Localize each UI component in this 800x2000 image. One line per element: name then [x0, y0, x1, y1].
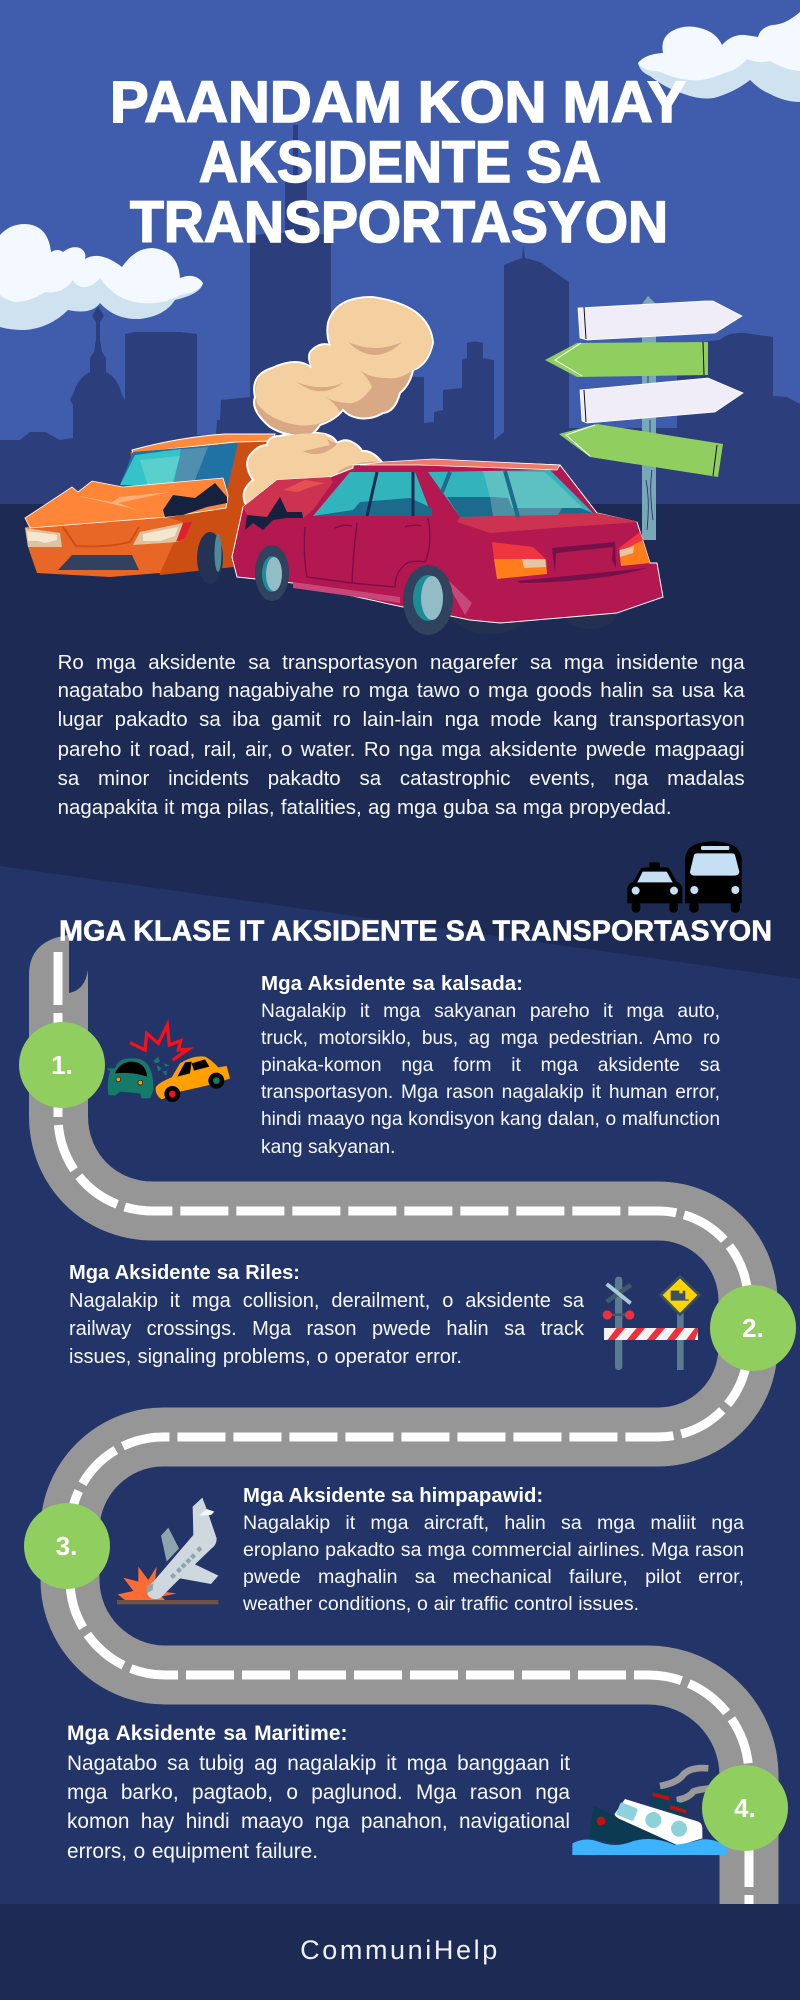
text: maritime accidents: errors, o equipment failure. [67, 1840, 318, 1862]
number badge 4 [702, 1765, 788, 1851]
signpost with four arrows [545, 296, 743, 540]
text: air accidents: pwede maghalin sa mechanical failure, pilot error, [243, 1566, 744, 1588]
car rear window [428, 470, 593, 517]
red car [232, 459, 663, 635]
text: rail accidents: Nagalakip it mga collision, derailment, o aksidente sa [69, 1290, 584, 1312]
panel: maritime accidents [67, 1722, 788, 1862]
icon: two cars colliding [106, 1019, 230, 1102]
number badge 1: 1. [51, 1050, 73, 1080]
text: road accidents [261, 1001, 720, 1158]
number badge 4: 4. [734, 1793, 756, 1823]
icon: sinking ship [572, 1764, 727, 1855]
smoke cloud [244, 297, 433, 512]
icon: railway crossing [602, 1275, 701, 1370]
intro text: Ro mga aksidente sa transportasyon nagarefer sa mga insidente nga [58, 651, 745, 674]
panel: rail accidents [69, 1262, 796, 1371]
text: air accidents [243, 1512, 744, 1615]
footer: brand name [0, 1904, 800, 2000]
intro text [58, 651, 745, 818]
car lights and details [492, 542, 546, 559]
orange car [25, 434, 275, 584]
intro text: pareho it road, rail, air, o water. Ro nga mga aksidente pwede magpaagi [58, 738, 745, 760]
cloud: left [0, 224, 203, 330]
panel: road accidents [19, 972, 720, 1158]
number badge 1 [19, 1022, 105, 1108]
panel: air accidents [24, 1485, 744, 1615]
intro text: nagatabo habang nagabiyahe ro mga tawo o mga goods halin sa usa ka [58, 679, 745, 702]
title: PAANDAM KON MAY [110, 70, 686, 135]
text: road accidents: Nagalakip it mga sakyanan pareho it mga auto, [261, 1001, 720, 1022]
hero scene: city, clouds, signpost and crashed cars [0, 0, 800, 635]
number badge 2 [710, 1285, 796, 1371]
text: air accidents: eroplano pakadto sa mga commercial airlines. Mga rason [243, 1539, 744, 1561]
number badge 3: 3. [56, 1531, 77, 1561]
car side windows [313, 472, 432, 516]
text: maritime accidents: komon hay hindi maayo nga panahon, navigational [67, 1810, 570, 1833]
intro text: lugar pakadto sa iba gamit ro lain-lain nga mode kang transportasyon [58, 708, 745, 731]
city skyline [0, 125, 800, 504]
text: air accidents: weather conditions, o air traffic control issues. [243, 1593, 639, 1615]
car front wheel [255, 545, 289, 601]
number badge 3 [24, 1503, 110, 1589]
heading: maritime accidents: Mga Aksidente sa Maritime: [67, 1722, 348, 1745]
intro text: nagapakita it mga pilas, fatalities, ag mga guba sa mga propyedad. [58, 796, 672, 818]
text: air accidents: Nagalakip it mga aircraft, halin sa mga maliit nga [243, 1512, 744, 1534]
text: road accidents: transportasyon. Mga rason nagalakip it human error, [261, 1082, 720, 1103]
footer: brand name: CommuniHelp [300, 1935, 500, 1965]
text: road accidents: truck, motorsiklo, bus, ag mga pedestrian. Amo ro [261, 1028, 720, 1049]
heading: rail accidents: Mga Aksidente sa Riles: [69, 1262, 300, 1284]
text: rail accidents: railway crossings. Mga rason pwede halin sa track [69, 1318, 584, 1340]
icon: taxi and bus [627, 841, 742, 913]
icon: crashing airplane [117, 1498, 218, 1604]
text: road accidents: kang sakyanan. [261, 1136, 395, 1158]
text: maritime accidents [67, 1752, 570, 1862]
lower section background [0, 866, 800, 1904]
section heading: MGA KLASE IT AKSIDENTE SA TRANSPORTASYON [59, 916, 772, 948]
title: AKSIDENTE SA [199, 130, 601, 195]
text: road accidents: hindi maayo nga kondisyon kang dalan, o malfunction [261, 1109, 720, 1130]
text: maritime accidents: Nagatabo sa tubig ag nagalakip it mga banggaan it [67, 1752, 570, 1774]
cloud: top right [638, 12, 800, 102]
title [110, 70, 686, 255]
intro text: sa minor incidents pakadto sa catastrophic events, nga madalas [58, 766, 745, 790]
heading: air accidents: Mga Aksidente sa himpapawid: [243, 1485, 543, 1507]
number badge 2: 2. [742, 1313, 764, 1343]
text: maritime accidents: mga barko, pagtaob, o paglunod. Mga rason nga [67, 1780, 570, 1804]
text: rail accidents [69, 1290, 584, 1368]
heading: road accidents: Mga Aksidente sa kalsada: [261, 972, 523, 995]
text: rail accidents: issues, signaling problems, o operator error. [69, 1346, 462, 1368]
car rear wheel [403, 565, 453, 635]
text: road accidents: pinaka-komon nga form it mga aksidente sa [261, 1055, 720, 1076]
title: TRANSPORTASYON [130, 190, 668, 255]
